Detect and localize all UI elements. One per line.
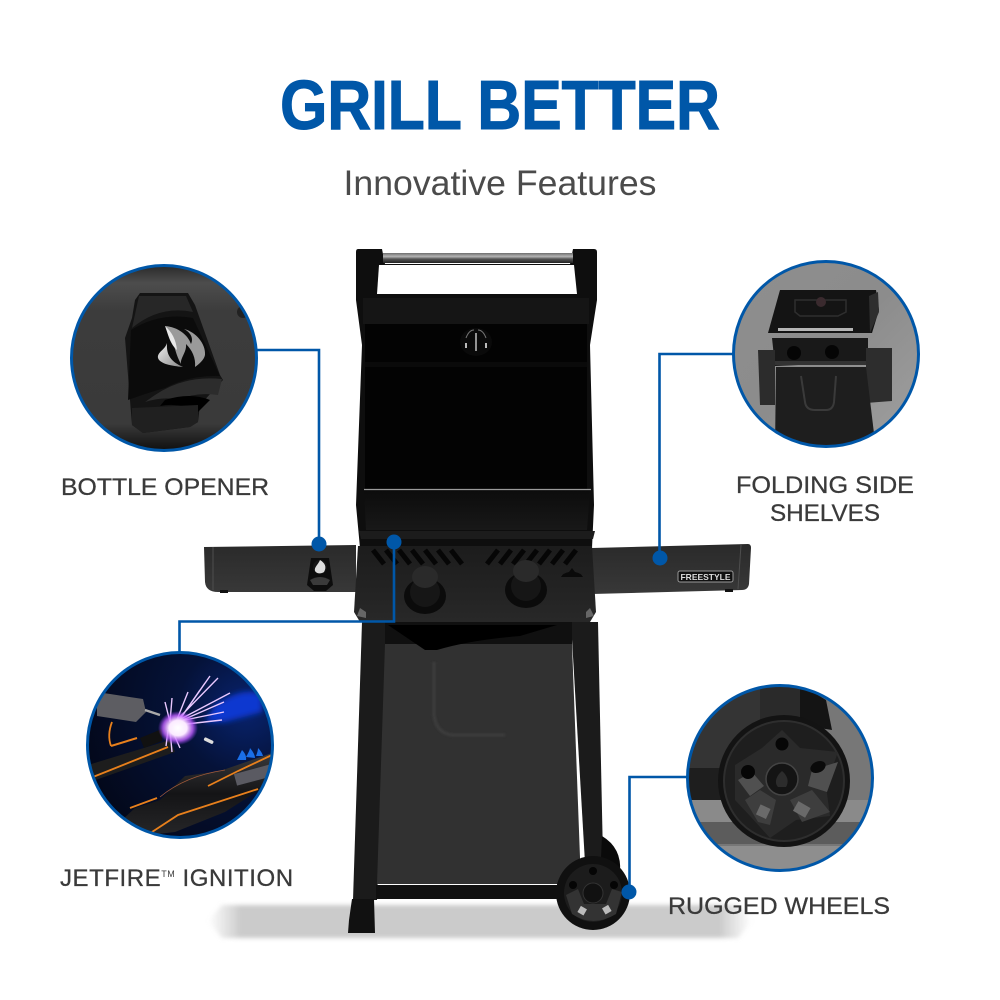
label: folding side shelves	[736, 472, 914, 527]
sparks	[165, 676, 230, 752]
burner tube lower	[122, 752, 275, 836]
connector lines	[180, 350, 733, 892]
label: folding side shelves: FOLDING SIDE	[736, 472, 914, 499]
panel: jetfire ignition circle	[86, 652, 275, 840]
wheel	[718, 715, 850, 847]
grill product	[204, 249, 751, 933]
grill lid open	[356, 249, 597, 548]
brand emblem	[561, 568, 583, 577]
vents	[373, 550, 576, 564]
knob left	[404, 566, 446, 614]
line: rugged wheels	[630, 777, 688, 892]
blue flames	[237, 748, 263, 760]
left side shelf	[204, 545, 356, 593]
panel: rugged wheels circle	[686, 684, 874, 872]
right side shelf: FREESTYLE	[680, 572, 731, 582]
panel: bottle opener circle	[70, 264, 258, 452]
ground shadow	[208, 905, 752, 938]
line: jetfire ignition	[180, 542, 394, 652]
igniter	[97, 692, 146, 722]
burner tube upper	[88, 740, 175, 782]
label: bottle opener: BOTTLE OPENER	[61, 474, 269, 501]
label: folding side shelves: SHELVES	[770, 500, 880, 527]
label: jetfire ignition: IGNITION	[175, 865, 294, 892]
title: GRILL BETTER	[280, 66, 720, 144]
panel: folding side shelves circle	[732, 260, 920, 450]
control panel	[354, 546, 596, 655]
line: folding shelves	[660, 354, 733, 558]
flame logo	[165, 326, 205, 367]
temperature gauge	[460, 328, 492, 356]
knob right	[505, 560, 547, 608]
opener body	[125, 293, 223, 433]
right side shelf	[592, 544, 751, 594]
label: jetfire ignition: JETFIRE	[60, 865, 161, 892]
mini grill	[768, 290, 879, 333]
cart wheel	[556, 836, 630, 930]
label: jetfire ignition: TM	[161, 869, 175, 879]
connector dots	[312, 534, 668, 900]
cart base	[348, 622, 603, 933]
subtitle: Innovative Features	[344, 164, 656, 203]
bottle opener on shelf	[307, 558, 333, 591]
label: rugged wheels: RUGGED WHEELS	[668, 893, 890, 920]
line: bottle opener	[257, 350, 319, 544]
